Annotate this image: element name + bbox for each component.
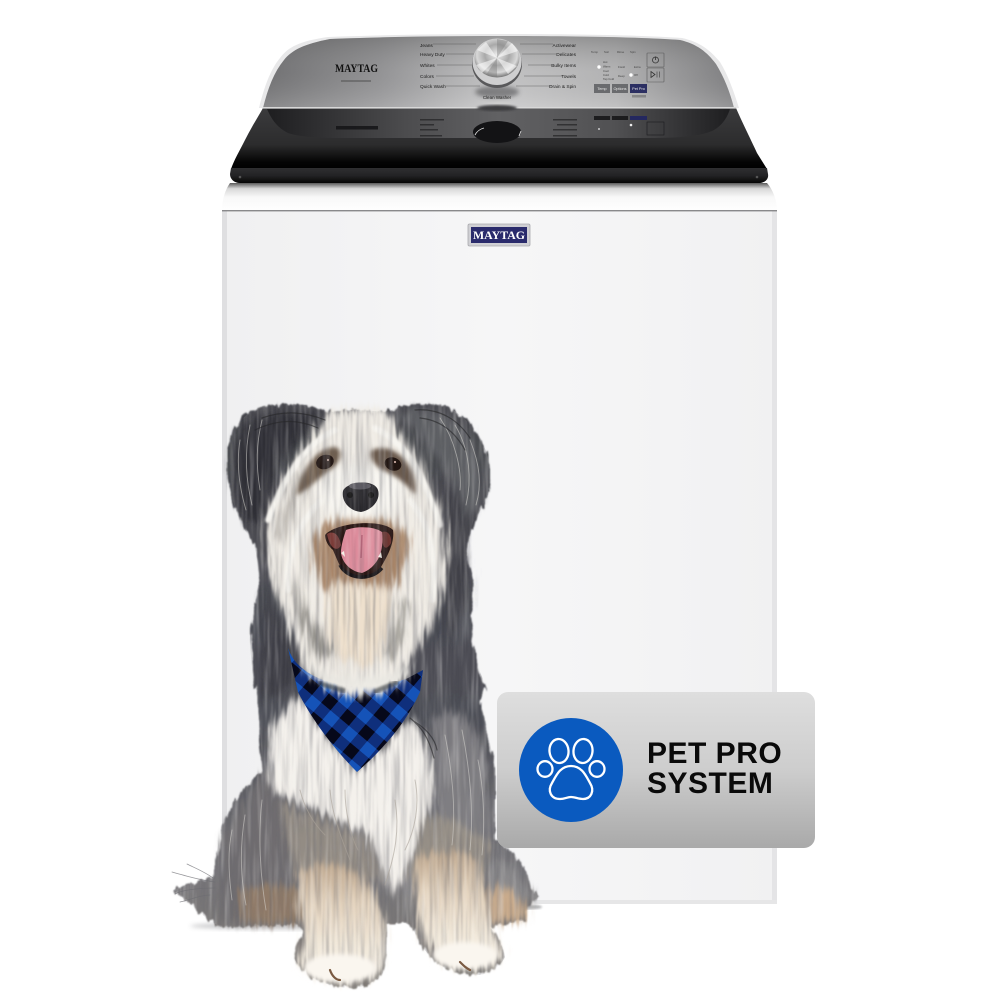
dog ground shadow bbox=[190, 922, 370, 930]
Maytag front badge bbox=[468, 224, 530, 246]
function buttons: Options bbox=[613, 87, 627, 91]
options grid: Temp bbox=[591, 50, 598, 54]
cycle labels right bbox=[549, 43, 577, 90]
white chest fur bbox=[269, 698, 433, 892]
cycle guide lines bbox=[433, 44, 563, 86]
start button bbox=[647, 68, 664, 82]
function buttons bbox=[594, 84, 647, 93]
eye patches bbox=[296, 447, 415, 495]
cycle labels left: Heavy Duty bbox=[420, 52, 445, 58]
options grid: Extra bbox=[634, 65, 641, 69]
flyaway tail hair bbox=[172, 864, 215, 902]
bandana bbox=[288, 648, 423, 772]
console silver fascia bbox=[259, 34, 739, 108]
clean washer label: Clean Washer bbox=[483, 95, 512, 100]
top shoulder of cabinet bbox=[222, 183, 777, 211]
options grid: Warm bbox=[603, 64, 611, 68]
options grid: Rinse bbox=[617, 50, 625, 54]
nose bbox=[343, 482, 379, 512]
long chest strands bbox=[300, 780, 417, 885]
options grid: Fresh bbox=[618, 65, 626, 69]
cycle labels left: Whites bbox=[420, 63, 435, 69]
cycle labels right: Delicates bbox=[556, 52, 577, 58]
lid glass bbox=[231, 108, 767, 169]
tan muzzle and beard bbox=[313, 515, 408, 665]
options grid: Hot bbox=[603, 60, 608, 64]
cabinet floor edge bbox=[222, 900, 777, 904]
washer: control console bbox=[259, 34, 739, 108]
options grid: Off bbox=[634, 73, 638, 77]
tongue bbox=[341, 527, 382, 573]
Maytag front badge: MAYTAG bbox=[473, 230, 525, 242]
option indicator lights bbox=[597, 65, 633, 77]
badge panel bbox=[497, 692, 815, 848]
options grid: Cool bbox=[603, 69, 609, 73]
cycle labels left: Quick Wash bbox=[420, 84, 446, 90]
cycle labels right: Activewear bbox=[553, 43, 576, 49]
eyes bbox=[314, 452, 403, 473]
cream legs and paws bbox=[240, 852, 527, 982]
gray-beige band low on chest bbox=[280, 800, 490, 880]
cycle labels left: Jeans bbox=[420, 43, 433, 49]
washer: white cabinet bbox=[222, 183, 777, 904]
highlight line at lid top bbox=[263, 107, 736, 109]
washer: black glass lid bbox=[230, 105, 768, 183]
reflected dial bbox=[473, 121, 521, 143]
options grid: Cold bbox=[603, 73, 609, 77]
paw highlight bbox=[304, 942, 497, 982]
lid front handle bbox=[230, 168, 768, 183]
badge text: PET PRO bbox=[647, 737, 782, 770]
badge: Pet Pro System bbox=[497, 692, 815, 848]
badge text: SYSTEM bbox=[647, 767, 773, 800]
ear and flank shading bbox=[220, 410, 535, 922]
white face and mane bbox=[267, 407, 447, 686]
toes bbox=[330, 962, 470, 980]
cabinet body bbox=[222, 211, 777, 904]
fur streak texture bbox=[170, 400, 540, 990]
cycle labels right: Drain & Spin bbox=[549, 84, 576, 90]
brow and cheek sweeps bbox=[268, 428, 440, 600]
cycle labels left: Colors bbox=[420, 74, 434, 80]
cycle labels right: Bulky Items bbox=[551, 63, 577, 69]
options grid bbox=[591, 50, 641, 81]
options grid: Soil bbox=[604, 50, 609, 54]
dog fur base silhouette bbox=[173, 404, 538, 988]
dog bbox=[170, 400, 542, 990]
console brand: MAYTAG bbox=[335, 61, 378, 75]
panel reflection in lid bbox=[267, 109, 730, 138]
options grid: Deep bbox=[618, 74, 625, 78]
cycle dial bbox=[472, 38, 522, 98]
grey strands in mane bbox=[275, 470, 410, 662]
icon: blue paw circle bbox=[519, 718, 623, 822]
function buttons: Pet Pro bbox=[632, 87, 645, 91]
strands: dark and white hair bbox=[172, 410, 484, 910]
options grid: Tap Cold bbox=[603, 77, 614, 81]
options grid: Spin bbox=[630, 50, 636, 54]
power button bbox=[647, 53, 664, 67]
cycle labels left bbox=[420, 43, 446, 90]
function buttons: Temp bbox=[597, 87, 607, 91]
cycle labels right: Towels bbox=[561, 74, 577, 80]
neck fur over bandana bbox=[303, 660, 418, 696]
open mouth bbox=[325, 523, 393, 579]
white snout bbox=[316, 464, 404, 520]
mirrored text hints bbox=[336, 116, 628, 136]
